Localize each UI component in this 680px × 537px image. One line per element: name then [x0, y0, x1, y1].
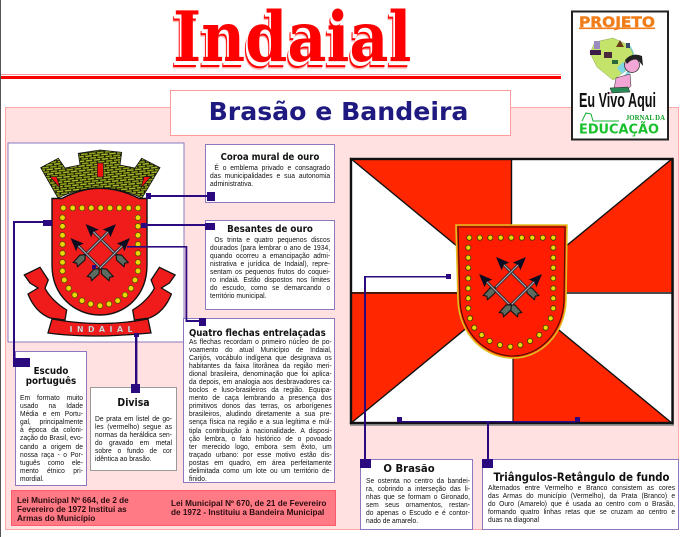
body text: à época da coloni- — [20, 425, 82, 434]
body text: traçado urbano: por esse motivo estão dis- — [189, 450, 332, 459]
law 664: Fevereiro de 1972 Institui as — [17, 505, 127, 514]
law 670: de 1972 - Instituiu a Bandeira Municipal — [171, 508, 324, 517]
body text — [20, 393, 83, 483]
body text: mento de caça lembrando a presença dos — [189, 393, 332, 402]
body text: território municipal. — [210, 291, 267, 300]
text box: Triângulos-Retângulo de fundo — [482, 459, 679, 530]
text box: Coroa mural de ouro — [205, 144, 335, 203]
body text — [488, 482, 675, 524]
connector: Besantes — [141, 223, 215, 230]
body text — [210, 162, 330, 188]
body text: tuguês como ele- — [20, 458, 82, 467]
flag shield beads — [466, 235, 556, 349]
body text: De prata em listel de go- — [95, 414, 172, 423]
flag shield — [456, 225, 567, 358]
law 664 — [17, 496, 129, 523]
body text — [366, 476, 470, 525]
ribbon — [24, 267, 175, 336]
body text: tipla contribuição à nacionalidade. A disposi- — [189, 426, 332, 435]
body text: quando ocorreu a emancipação admi- — [210, 251, 330, 260]
title rule — [1, 74, 561, 79]
logo: heading PROJETO: PROJETO — [579, 15, 655, 31]
body text: gal, principalmente — [20, 417, 82, 426]
connector: Coroa — [146, 192, 215, 201]
body text: Média e em Portu- — [20, 409, 82, 418]
body text: les (vermelho) segue as — [95, 422, 172, 431]
body text — [189, 336, 332, 483]
connector: Quatro flechas — [92, 246, 206, 326]
body text: do apenas o Escudo e é contor- — [366, 508, 470, 517]
text box: Divisa — [90, 387, 177, 471]
body text: duas na diagonal — [488, 515, 539, 524]
law 670: Lei Municipal Nº 670, de 21 de Fevereiro — [171, 499, 326, 508]
heading: O Brasão — [383, 463, 435, 475]
body text: brasileiros, aludindo diretamente a sua pre- — [189, 409, 332, 418]
body text: formando quatro linhas retas que se cruzam ao centro e — [488, 507, 675, 516]
body text: sobre o fundo de cor — [95, 446, 172, 455]
body text: voamento do atual Município de Indaial, — [189, 345, 332, 354]
flag red triangles — [350, 158, 673, 424]
body text: ro indaiá. Estão dispostos nos limites — [210, 275, 330, 284]
legal notes bar — [11, 490, 336, 526]
heading: Coroa mural de ouro — [221, 152, 319, 162]
heading: português — [26, 376, 76, 387]
subtitle box: Brasão e Bandeira — [209, 97, 468, 126]
body text: Carijós, vocábulo indígena que designava os — [189, 353, 332, 362]
body text: da depois, em analogia aos desbravadores ca- — [189, 377, 332, 386]
flag lines — [350, 158, 673, 424]
text box: Quatro flechas entrelaçadas — [183, 318, 335, 483]
connector: Triângulos — [397, 417, 580, 468]
shield — [52, 188, 147, 315]
body text: delimitada como um lote ou um território de- — [189, 466, 332, 475]
body text: mordial. — [20, 474, 43, 483]
text box: Besantes de ouro — [205, 220, 335, 310]
body text: cando a origem de — [20, 442, 82, 451]
heading: Escudo — [34, 366, 68, 377]
body text: do gravado em metal — [95, 438, 172, 447]
body text: Os trinta e quatro pequenos discos — [214, 234, 330, 244]
body text: nistrativa e jurídica de Indaial), repre- — [210, 259, 330, 268]
law 664: Armas do Município — [17, 514, 95, 523]
body text — [210, 234, 330, 300]
body text: administrativa. — [210, 179, 253, 188]
body text: ção lembra, o fato histórico de o povoado — [189, 434, 332, 443]
body text — [95, 414, 172, 463]
subtitle box — [170, 90, 511, 136]
body text: dourados (para lembrar o ano de 1934, — [210, 243, 330, 252]
body text: dional brasileira, denominação que foi aplica- — [189, 369, 332, 378]
body text: sentam os pequenos frutos do coquei- — [210, 267, 330, 276]
body text: ter merecido logo, embora sem êxito, um — [189, 442, 332, 451]
body text: Alternados entre Vermelho e Branco consistem as cores — [488, 482, 675, 492]
body text: do Ouro (Amarelo) que é usada ao centro com o Brasão, — [488, 499, 675, 508]
body text: idêntica ao brasão. — [95, 454, 152, 463]
body text: nossa raça - o Por- — [20, 450, 82, 459]
law 664: Lei Municipal Nº 664, de 2 de — [17, 496, 129, 505]
body text: normas da heráldica sen- — [95, 430, 172, 439]
body text: finido. — [189, 474, 207, 483]
body text: das Armas do município (Vermelho), da Prata (Branco) e — [488, 491, 675, 500]
body text: das municipalidades e sua autonomia — [210, 171, 330, 180]
logo: map and figure — [590, 38, 643, 94]
connector: Divisa — [131, 333, 140, 393]
flag crossed arrows — [477, 255, 544, 318]
body text: Em formato muito — [20, 393, 82, 402]
logo: Educação: EDUCAÇÃO — [579, 122, 659, 138]
logo: Jornal da: JORNAL DA — [626, 115, 665, 122]
body text: postas em quadro, em área perfeitamente — [189, 458, 332, 467]
law 670 — [171, 499, 326, 517]
heading: Triângulos-Retângulo de fundo — [493, 470, 670, 484]
text box: Escudo português — [15, 351, 87, 486]
body text: primitivos donos das terras, os arborígenes — [189, 401, 332, 410]
shield beads — [60, 205, 141, 309]
page left edge — [0, 0, 1, 537]
body text: As flechas recordam o primeiro núcleo de po- — [189, 336, 332, 346]
heading: Divisa — [117, 396, 150, 409]
body text: nhas que se formam o Gironado, — [366, 492, 470, 501]
body text: ra, cobrindo a interseção das li- — [366, 484, 470, 493]
heading — [26, 366, 76, 387]
background panel — [5, 107, 679, 530]
connector: Escudo — [13, 220, 52, 367]
body text: É o emblema privado e consagrado — [214, 162, 330, 172]
body text: nado de amarelo. — [366, 516, 418, 525]
body text: usado na Idade — [20, 401, 82, 410]
ribbon motto: INDAIAL — [70, 325, 132, 334]
body text: boclos e luso-brasileiros da região. Equipa- — [189, 385, 332, 394]
body text: do escudo, como se demarcando o — [210, 283, 330, 292]
text box: O Brasão — [360, 459, 473, 530]
body text: Se ostenta no centro da bandei- — [366, 476, 470, 484]
crown — [41, 150, 160, 198]
heading: Besantes de ouro — [227, 224, 313, 234]
body text: sença física na região e a sua legítima e múl- — [189, 417, 332, 426]
body text: habitantes da faixa litorânea da região meri- — [189, 361, 332, 370]
body text: mento étnico pri- — [20, 466, 82, 475]
body text: zação do Brasil, evo- — [20, 433, 82, 442]
heading: Quatro flechas entrelaçadas — [189, 328, 326, 338]
connector: O Brasão — [360, 274, 451, 468]
crossed arrows — [68, 222, 132, 282]
body text: sem seus ornamentos, restan- — [366, 500, 470, 509]
